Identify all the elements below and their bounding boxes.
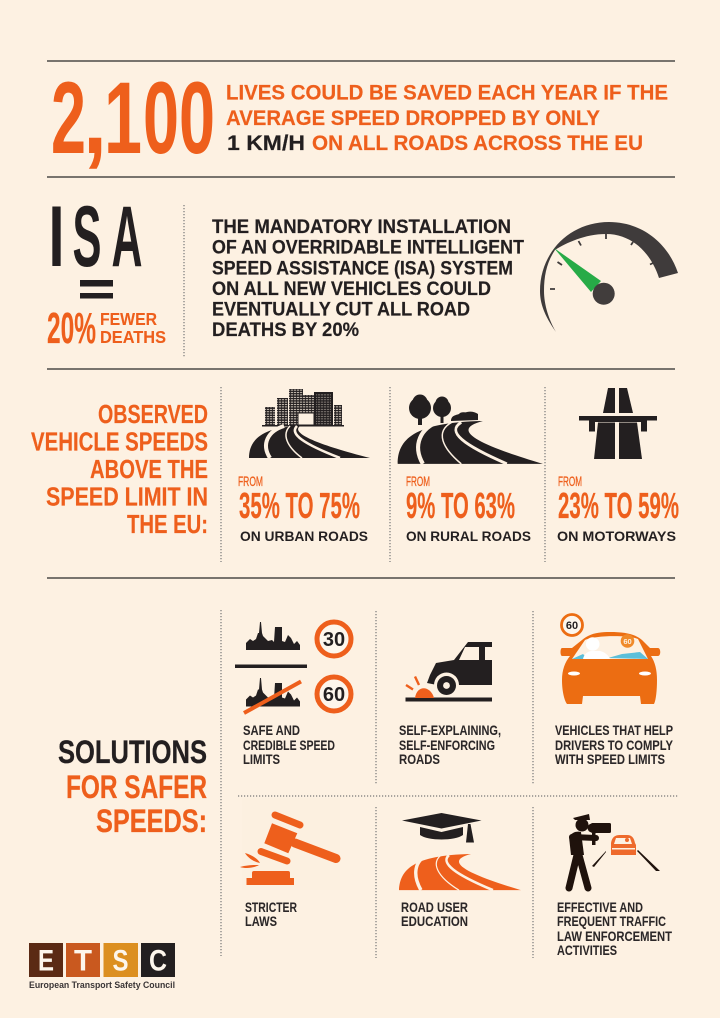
- label: DRIVERS TO COMPLY: [555, 738, 673, 753]
- solution: law enforcement: [557, 814, 673, 958]
- heading: observed vehicle speeds: ABOVE THE: [90, 456, 208, 484]
- ISA equals 20% fewer deaths: DEATHS: [100, 327, 166, 347]
- rural roads column: [398, 394, 543, 544]
- stat: rural roads: [406, 473, 531, 544]
- stat: rural roads: FROM: [406, 473, 430, 489]
- label: [555, 723, 673, 767]
- label: ACTIVITIES: [557, 943, 617, 958]
- panel: ISA: [47, 189, 678, 357]
- ISA equals 20% fewer deaths: A: [112, 189, 142, 285]
- ISA description text: EVENTUALLY CUT ALL ROAD: [212, 298, 470, 320]
- label: EDUCATION: [401, 914, 468, 929]
- icon: skylines and speed signs: 60: [323, 684, 345, 706]
- logo: ETSC: [29, 943, 175, 990]
- ISA description text: THE MANDATORY INSTALLATION: [212, 216, 511, 238]
- label: WITH SPEED LIMITS: [555, 752, 665, 767]
- stat: motorways: ON MOTORWAYS: [557, 529, 676, 544]
- big number 2,100: 0: [143, 61, 179, 175]
- label: ROADS: [399, 752, 440, 767]
- ISA description text: SPEED ASSISTANCE (ISA) SYSTEM: [212, 258, 513, 280]
- icon: car with speed limiter: 60: [566, 620, 578, 632]
- label: SAFE AND: [243, 723, 300, 738]
- icon: city and road: [249, 389, 370, 458]
- ISA equals 20% fewer deaths: I: [48, 189, 64, 285]
- icon: motorway: [579, 388, 657, 459]
- stat: rural roads: 9% TO 63%: [406, 485, 515, 526]
- label: STRICTER: [245, 900, 297, 915]
- label: [243, 723, 335, 767]
- label: SELF-EXPLAINING,: [399, 723, 501, 738]
- label: EFFECTIVE AND: [557, 900, 643, 915]
- big number 2,100: [51, 61, 215, 175]
- ISA description text: ON ALL NEW VEHICLES COULD: [212, 278, 491, 300]
- stat: urban roads: FROM: [238, 473, 263, 489]
- label: ROAD USER: [401, 900, 468, 915]
- heading: solutions: [58, 734, 207, 839]
- headline statement: AVERAGE SPEED DROPPED BY ONLY: [226, 107, 600, 130]
- label: VEHICLES THAT HELP: [555, 723, 673, 738]
- label: [245, 900, 297, 929]
- headline statement: ON ALL ROADS ACROSS THE EU: [312, 132, 643, 155]
- urban roads column: [238, 389, 370, 544]
- heading: observed vehicle speeds: [31, 401, 208, 539]
- ISA description text: [212, 216, 524, 341]
- label: [399, 723, 501, 767]
- headline statement: 1 KM/H: [227, 132, 305, 155]
- solution: road user education: [399, 813, 521, 929]
- big number 2,100: ,: [83, 61, 107, 175]
- ISA equals 20% fewer deaths: 20%: [47, 305, 96, 353]
- stat: motorways: [557, 473, 679, 544]
- stat: rural roads: ON RURAL ROADS: [406, 529, 531, 544]
- label: CREDIBLE SPEED: [243, 738, 335, 753]
- panel: solutions for safer speeds: [58, 610, 678, 958]
- label: [401, 900, 468, 929]
- label: LAW ENFORCEMENT: [557, 929, 673, 944]
- logo: ETSC: E: [38, 944, 54, 978]
- logo: ETSC: European Transport Safety Council: [29, 980, 175, 990]
- big number 2,100: 2: [51, 61, 86, 175]
- ISA equals 20% fewer deaths: FEWER: [100, 309, 157, 329]
- solution: safe and credible speed limits: [235, 622, 351, 767]
- ISA equals 20% fewer deaths: [47, 189, 166, 353]
- headline statement: LIVES COULD BE SAVED EACH YEAR IF THE: [226, 82, 668, 104]
- heading: solutions: SPEEDS:: [96, 803, 207, 839]
- icon: police officer with speed camera: [569, 814, 660, 888]
- heading: solutions: SOLUTIONS: [58, 734, 207, 770]
- heading: observed vehicle speeds: THE EU:: [127, 511, 208, 539]
- solution: stricter laws: [240, 798, 340, 929]
- label: FREQUENT TRAFFIC: [557, 914, 666, 929]
- label: LIMITS: [243, 752, 280, 767]
- logo: ETSC: C: [149, 944, 167, 978]
- heading: observed vehicle speeds: VEHICLE SPEEDS: [31, 428, 208, 456]
- big number 2,100: 0: [179, 61, 215, 175]
- heading: solutions: FOR SAFER: [66, 769, 207, 805]
- panel: 2,100 lives headline: [51, 61, 668, 175]
- label: LAWS: [245, 914, 277, 929]
- stat: urban roads: [238, 473, 368, 544]
- ISA description text: OF AN OVERRIDABLE INTELLIGENT: [212, 236, 524, 258]
- icon: car on speed bump: [406, 642, 492, 702]
- panel: observed vehicle speeds: [31, 387, 679, 562]
- motorways column: [557, 388, 679, 544]
- icon: speedometer gauge: [540, 222, 678, 332]
- label: SELF-ENFORCING: [399, 738, 495, 753]
- stat: urban roads: 35% TO 75%: [239, 485, 360, 526]
- icon: graduation cap and road: [399, 813, 521, 890]
- label: [557, 900, 673, 958]
- logo: ETSC: S: [112, 944, 128, 978]
- icon: car with speed limiter: [560, 614, 660, 704]
- icon: gavel: [240, 798, 340, 890]
- logo: ETSC: T: [74, 944, 92, 978]
- icon: car with speed limiter: 60: [623, 637, 632, 646]
- heading: observed vehicle speeds: SPEED LIMIT IN: [46, 484, 208, 512]
- ISA equals 20% fewer deaths: S: [72, 189, 102, 285]
- stat: urban roads: ON URBAN ROADS: [240, 529, 368, 544]
- big number 2,100: 1: [104, 61, 142, 175]
- solution: self-explaining roads: [399, 642, 501, 767]
- ISA description text: DEATHS BY 20%: [212, 319, 359, 341]
- icon: trees and road: [398, 394, 543, 464]
- icon: skylines and speed signs: [235, 622, 351, 713]
- stat: motorways: FROM: [558, 473, 582, 489]
- heading: observed vehicle speeds: OBSERVED: [98, 401, 208, 429]
- icon: skylines and speed signs: 30: [323, 629, 345, 651]
- headline statement: [226, 82, 668, 155]
- solution: vehicles that help drivers: [555, 614, 673, 767]
